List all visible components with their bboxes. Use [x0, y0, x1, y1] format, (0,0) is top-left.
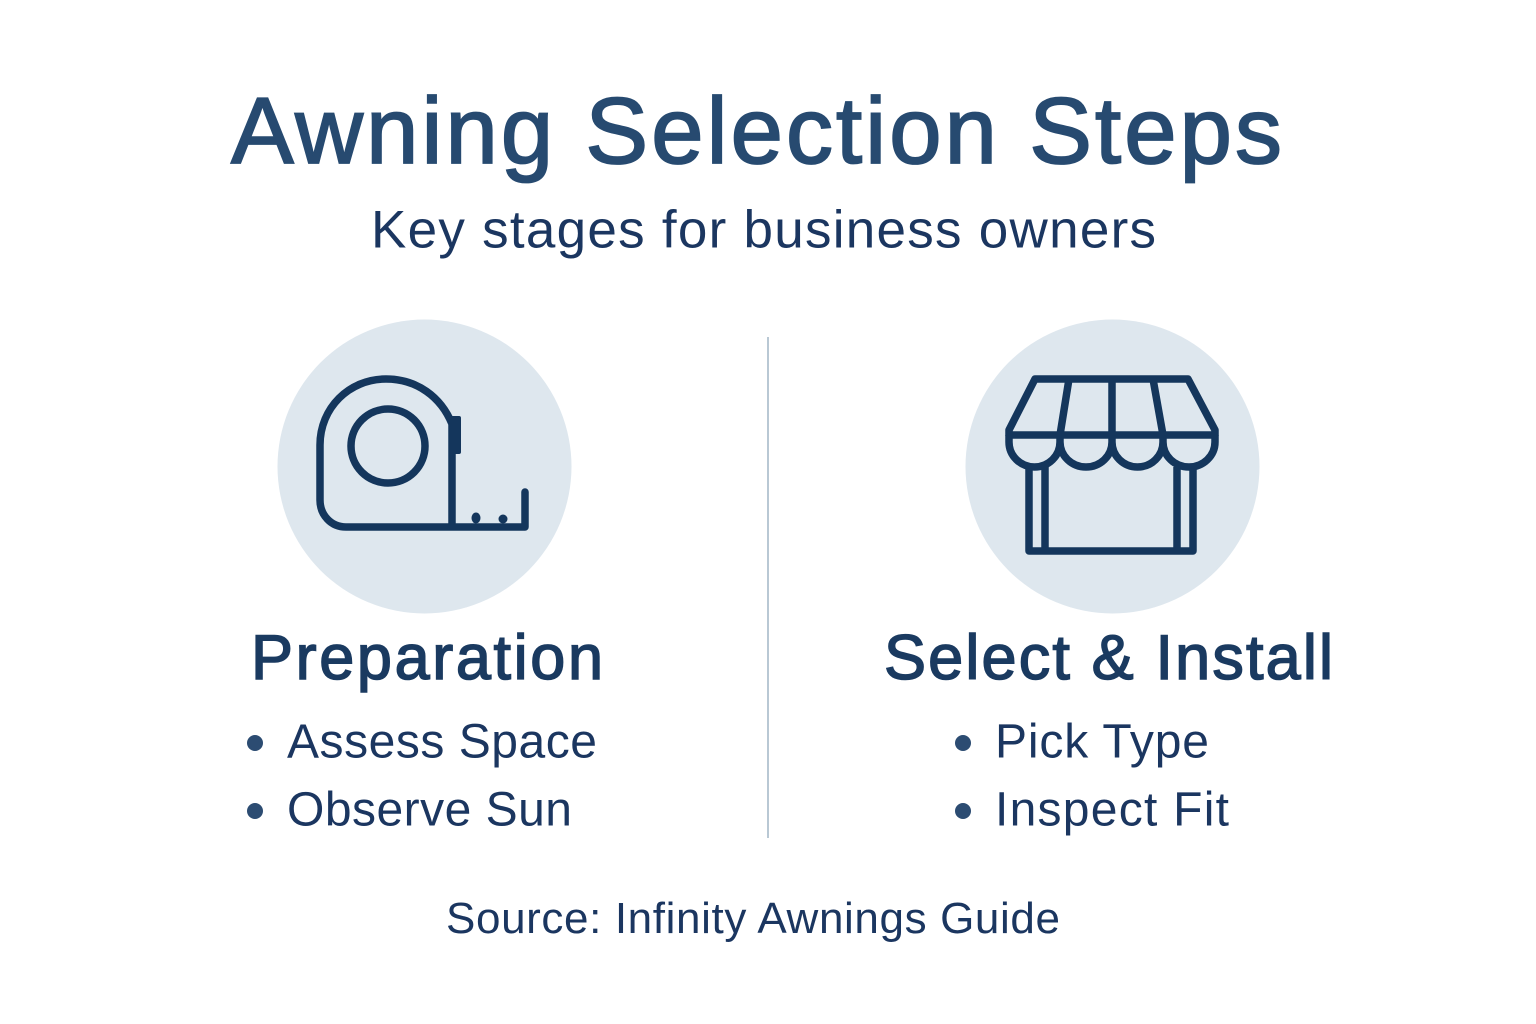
bullet list: preparation: Assess Space	[287, 716, 597, 768]
panel: preparation	[247, 320, 603, 836]
panel: select and install	[884, 320, 1333, 836]
heading: select and install: Select & Install	[884, 623, 1333, 693]
icon: tape measure	[278, 320, 572, 614]
divider	[767, 337, 769, 838]
bullet list: select and install: Pick Type	[995, 716, 1209, 768]
icon: storefront awning	[966, 320, 1260, 614]
bullet list: select and install: Inspect Fit	[995, 784, 1229, 836]
source note: Source: Infinity Awnings Guide	[446, 894, 1060, 943]
title: Awning Selection Steps	[231, 78, 1282, 183]
heading: preparation: Preparation	[251, 623, 603, 693]
bullet list: preparation: Observe Sun	[287, 784, 572, 836]
bullet list: preparation	[247, 716, 597, 836]
bullet list: select and install	[955, 716, 1229, 836]
subtitle: Key stages for business owners	[371, 200, 1156, 260]
